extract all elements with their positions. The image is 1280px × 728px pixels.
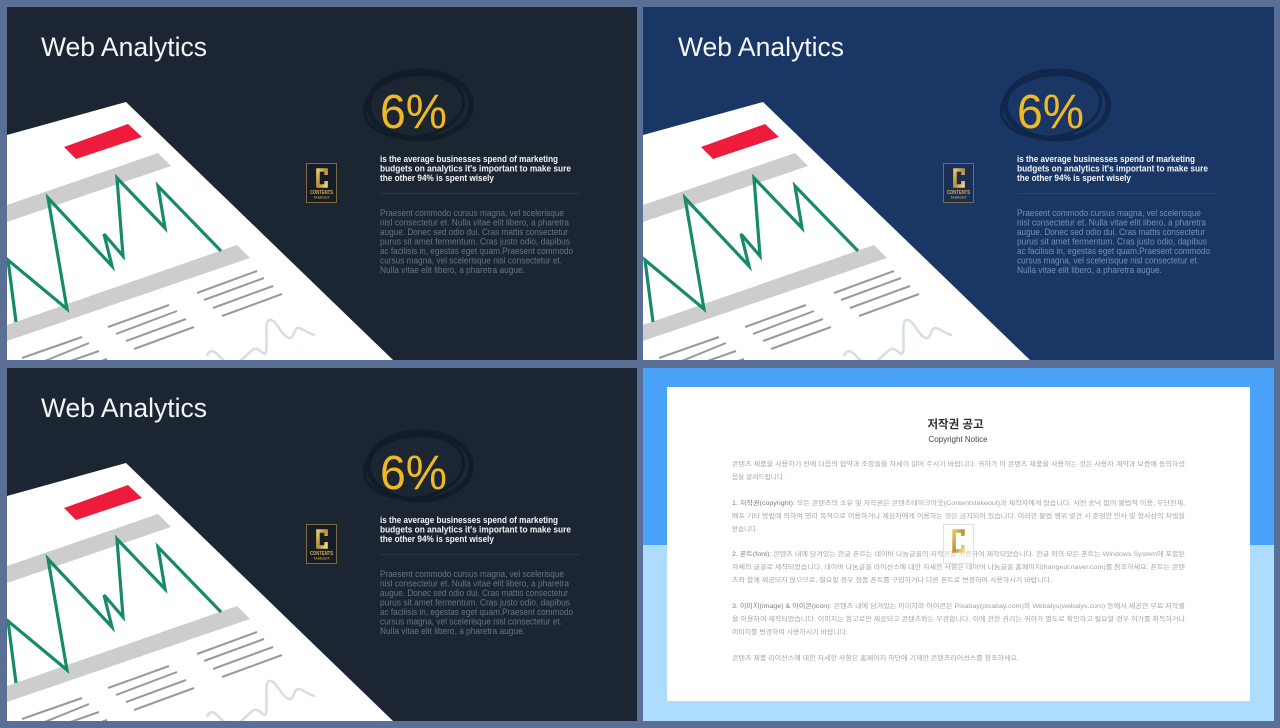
body text: nisl consectetur et. Nulla vitae elit libero, a pharetra — [1017, 218, 1206, 228]
body text: purus sit amet fermentum. Cras justo odio, dapibus — [380, 598, 570, 608]
body text: nisl consectetur et. Nulla vitae elit libero, a pharetra — [380, 578, 569, 588]
panel: dark slide top left — [7, 7, 637, 380]
body text — [380, 208, 573, 275]
heading: copyright notice: Copyright Notice — [928, 435, 988, 444]
key statement — [380, 154, 571, 183]
notice intro: 음을 알려드립니다. — [732, 472, 785, 481]
body text: Praesent commodo cursus magna, vel scelerisque — [380, 569, 564, 579]
notice intro — [732, 459, 1185, 481]
icon: contents logo: TAKEOUT — [950, 196, 967, 200]
notice intro: 콘텐츠 제품을 사용하기 전에 다음의 협약과 조항들을 자세히 읽어 주시기 바랍니다. 귀하가 이 콘텐츠 제품을 사용하는 것은 사용자 계약과 보증에 동의하셨 — [732, 459, 1185, 468]
body text: augue. Donec sed odio dui. Cras mattis consectetur — [380, 227, 568, 237]
key statement — [380, 515, 571, 544]
key statement: is the average businesses spend of marketing — [1017, 154, 1195, 164]
body text: augue. Donec sed odio dui. Cras mattis consectetur — [380, 588, 568, 598]
key statement: the other 94% is spent wisely — [380, 534, 494, 544]
big number: 6% — [380, 447, 447, 500]
icon: hand-drawn circle — [360, 429, 472, 505]
body text: Nulla vitae elit libero, a pharetra augue. — [380, 265, 525, 275]
notice section 1: 받습니다. — [732, 524, 758, 533]
body text: Nulla vitae elit libero, a pharetra augue. — [380, 626, 525, 636]
body text: ac facilisis in, egestas eget quam.Praesent commodo — [380, 607, 573, 617]
body text: cursus magna, vel scelerisque nisl consectetur et. — [380, 256, 562, 266]
body text: purus sit amet fermentum. Cras justo odio, dapibus — [1017, 236, 1207, 246]
icon: contents logo: CONTENTS — [310, 551, 334, 557]
key statement: the other 94% is spent wisely — [380, 173, 494, 183]
body text: cursus magna, vel scelerisque nisl consectetur et. — [1017, 256, 1199, 266]
notice section 3: 이미지를 변경하여 사용하시기 바랍니다. — [732, 627, 848, 636]
body text — [380, 569, 573, 636]
key statement: is the average businesses spend of marketing — [380, 154, 558, 164]
body text: ac facilisis in, egestas eget quam.Praesent commodo — [1017, 246, 1210, 256]
icon: hand-drawn circle — [360, 68, 472, 144]
body text: augue. Donec sed odio dui. Cras mattis consectetur — [1017, 227, 1205, 237]
panel: navy slide top right — [643, 7, 1274, 380]
icon: contents logo — [306, 164, 336, 202]
icon: contents logo: CONTENTS — [310, 190, 334, 196]
key statement: budgets on analytics it's important to make sure — [380, 164, 571, 174]
body text: purus sit amet fermentum. Cras justo odio, dapibus — [380, 236, 570, 246]
key statement: budgets on analytics it's important to make sure — [380, 524, 571, 534]
body text — [1017, 208, 1210, 275]
key statement: the other 94% is spent wisely — [1017, 173, 1131, 183]
notice section 2: 자체의 글꼴로 제작되었습니다. 네이버 나눔글꼴 라이선스에 대한 자세한 사항은 네이버 나눔글꼴 홈페이지(hangeul.naver.com)를 참조하세요. 폰트는 콘텐 — [732, 562, 1185, 571]
heading: copyright notice: 저작권 공고 — [927, 417, 984, 431]
icon: contents logo — [944, 164, 974, 202]
illustration: analytics report page — [643, 102, 1030, 380]
icon: contents logo — [306, 524, 336, 564]
icon: contents logo: TAKEOUT — [314, 556, 330, 560]
icon: contents logo: CONTENTS — [947, 190, 971, 196]
notice section 3 — [732, 601, 1185, 636]
notice section 2: 츠와 함께 제공되지 않으므로, 필요할 경우 정품 폰트를 구입하거나 다른 폰트로 변경하여 사용하시기 바랍니다. — [732, 575, 1052, 584]
notice section 3: 을 이용하여 제작되었습니다. 이미지는 참고로만 제공되고 콘텐츠와는 무관합니다. 이에 관한 권리는 귀하가 별도로 확인하고 필요할 경우 허가를 취득하거나 — [732, 614, 1185, 623]
illustration: analytics report page — [7, 102, 393, 380]
key statement — [1017, 154, 1208, 183]
notice closing line: 콘텐츠 제품 라이선스에 대한 자세한 사항은 홈페이지 하단에 기재한 콘텐츠라이선스를 참조하세요. — [732, 653, 1019, 662]
body text: ac facilisis in, egestas eget quam.Praesent commodo — [380, 246, 573, 256]
key statement: is the average businesses spend of marketing — [380, 515, 558, 525]
panel: dark slide bottom left — [7, 368, 637, 728]
illustration: analytics report page — [7, 463, 393, 728]
big number: 6% — [380, 86, 447, 139]
heading: copyright notice — [927, 417, 988, 444]
key statement: budgets on analytics it's important to make sure — [1017, 164, 1208, 174]
icon: contents logo: TAKEOUT — [314, 196, 330, 200]
notice section 3: 3. 이미지(image) & 아이콘(icon): 콘텐츠 내에 담겨있는 이미지와 아이콘은 Pixabay(pixabay.com)와 Webalys(webalys.com) 등에서 제공한 무료 저작물 — [732, 601, 1185, 610]
title: Web Analytics — [678, 32, 844, 62]
body text: cursus magna, vel scelerisque nisl consectetur et. — [380, 616, 562, 626]
notice section 1: 1. 저작권(copyright): 모든 콘텐츠의 소유 및 저작권은 콘텐츠테이크아웃(Contentstakeout)과 제작자에게 있습니다. 사전 승낙 없이 불법적 이용, 무단전재, — [732, 498, 1185, 507]
notice section 2 — [732, 549, 1185, 584]
notice section 2: 2. 폰트(font): 콘텐츠 내에 담겨있는 한글 폰트는 네이버 나눔글꼴의 저작권을 기증하여 제작되었습니다. 한글 외의 모든 폰트는 Windows System에 포함된 — [732, 549, 1185, 558]
panel: copyright notice slide — [643, 368, 1274, 721]
notice section 1: 배포 기타 방법에 의하여 영리 목적으로 이용하거나 제삼자에게 이용하는 것은 금지되어 있습니다. 이러한 불법 행위 발견 시 준엄한 민사 및 형사상의 처벌을 — [732, 511, 1185, 520]
notice section 1 — [732, 498, 1185, 533]
icon: hand-drawn circle — [997, 68, 1108, 144]
body text: Praesent commodo cursus magna, vel scelerisque — [1017, 208, 1201, 218]
title: Web Analytics — [41, 393, 207, 423]
body text: Praesent commodo cursus magna, vel scelerisque — [380, 208, 564, 218]
big number: 6% — [1017, 86, 1084, 139]
title: Web Analytics — [41, 32, 207, 62]
body text: nisl consectetur et. Nulla vitae elit libero, a pharetra — [380, 218, 569, 228]
body text: Nulla vitae elit libero, a pharetra augue. — [1017, 265, 1162, 275]
icon: contents logo watermark — [944, 524, 974, 564]
